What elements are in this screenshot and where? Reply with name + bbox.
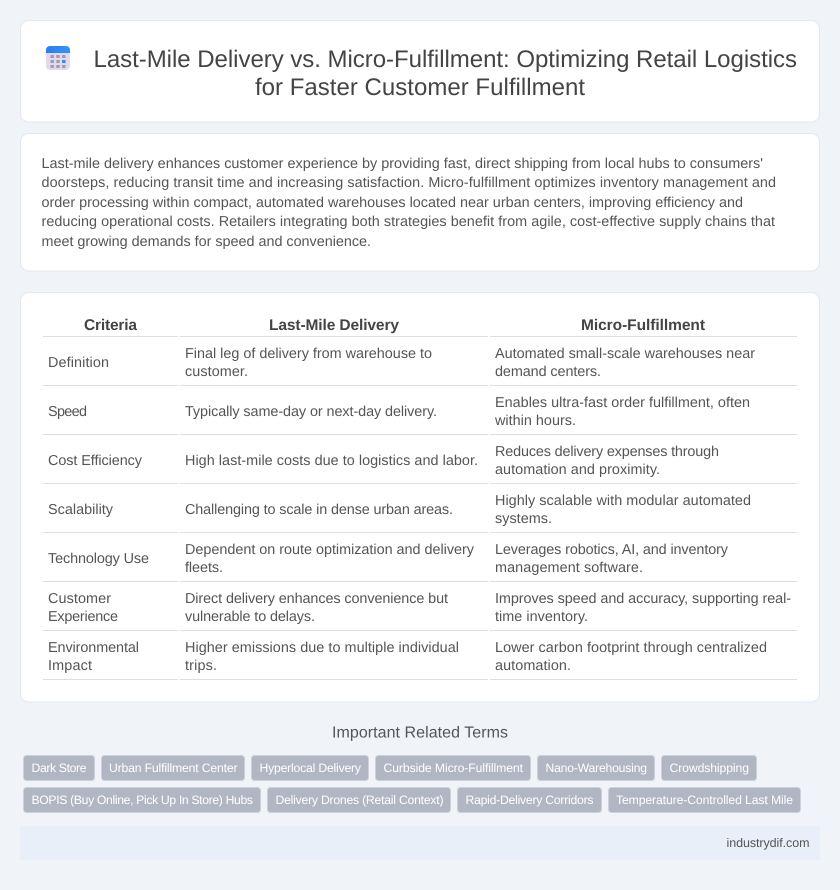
row: definition: Final leg of delivery from warehouse to <box>185 346 432 362</box>
tag list: related terms: Temperature-Controlled Last Mile <box>616 793 793 807</box>
row: customer experience <box>48 591 791 625</box>
row: environmental impact: Lower carbon footprint through centralized <box>495 640 767 656</box>
title: for Faster Customer Fulfillment <box>255 74 585 101</box>
row: scalability: systems. <box>495 511 552 527</box>
row: scalability: Highly scalable with modular automated <box>495 493 751 509</box>
panel: title header <box>20 20 820 122</box>
footer band <box>20 826 820 860</box>
row: definition: Automated small-scale warehouses near <box>495 346 755 362</box>
row: environmental impact: trips. <box>185 658 217 674</box>
row: environmental impact: Higher emissions due to multiple individual <box>185 640 459 656</box>
row: technology use: Technology Use <box>48 551 149 567</box>
row: scalability: Challenging to scale in dense urban areas. <box>185 502 453 518</box>
row: cost efficiency: Reduces delivery expenses through <box>495 444 719 460</box>
row: cost efficiency <box>48 444 719 478</box>
row: technology use: Leverages robotics, AI, and inventory <box>495 542 729 558</box>
row: environmental impact <box>48 640 767 674</box>
row: cost efficiency: Cost Efficiency <box>48 453 143 469</box>
row: customer experience: Customer <box>48 591 111 607</box>
tag list: related terms: Delivery Drones (Retail Context) <box>276 793 444 807</box>
row: definition: demand centers. <box>495 364 601 380</box>
tag list: related terms <box>24 756 800 812</box>
tag list: related terms: Crowdshipping <box>670 761 749 775</box>
row: speed: Typically same-day or next-day delivery. <box>185 404 437 420</box>
table header row: Criteria <box>84 317 137 334</box>
row: definition <box>48 346 755 380</box>
row: environmental impact: Impact <box>48 658 92 674</box>
row: cost efficiency: automation and proximity. <box>495 462 660 478</box>
row: definition: Definition <box>48 355 109 371</box>
row: scalability: Scalability <box>48 502 114 518</box>
row: environmental impact: Environmental <box>48 640 139 656</box>
row: environmental impact: automation. <box>495 658 571 674</box>
row: definition: customer. <box>185 364 248 380</box>
table header row <box>84 317 705 334</box>
row: customer experience: vulnerable to delays. <box>185 609 315 625</box>
panel: summary paragraph <box>20 134 820 271</box>
footer band: industrydif.com <box>726 836 810 850</box>
table header row: Micro-Fulfillment <box>581 317 705 334</box>
row: speed: Speed <box>48 404 87 420</box>
title <box>94 46 797 101</box>
panel: comparison table <box>20 292 820 702</box>
heading: important related terms: Important Related Terms <box>332 724 508 742</box>
row: cost efficiency: High last-mile costs due to logistics and labor. <box>185 453 478 469</box>
panel: summary paragraph: doorsteps, reducing transit time and increasing satisfaction. Micro-fulfillment optimizes inventory management and <box>42 175 776 191</box>
tag list: related terms: Hyperlocal Delivery <box>260 761 362 775</box>
panel: summary paragraph: order processing within compact, automated warehouses located near urban centers, improving efficiency and <box>42 195 743 211</box>
tag list: related terms: Rapid-Delivery Corridors <box>466 793 594 807</box>
tag list: related terms: Nano-Warehousing <box>546 761 647 775</box>
panel: summary paragraph: meet growing demands for speed and convenience. <box>42 234 371 250</box>
row: customer experience: time inventory. <box>495 609 588 625</box>
panel: summary paragraph: Last-mile delivery enhances customer experience by providing fast, direct shipping from local hubs to consumers' <box>42 156 763 172</box>
row: speed: Enables ultra-fast order fulfillment, often <box>495 395 750 411</box>
icon: calendar grid <box>46 46 70 70</box>
row: speed: within hours. <box>494 413 576 429</box>
row: scalability <box>48 493 751 527</box>
tag list: related terms: Urban Fulfillment Center <box>109 761 238 775</box>
row: customer experience: Direct delivery enhances convenience but <box>185 591 448 607</box>
panel: summary paragraph: reducing operational costs. Retailers integrating both strategies benefit from agile, cost-effective supply chains that <box>42 214 775 230</box>
tag list: related terms: Curbside Micro-Fulfillment <box>384 761 524 775</box>
row: customer experience: Experience <box>48 609 118 625</box>
row: technology use: management software. <box>495 560 643 576</box>
row: technology use: fleets. <box>185 560 223 576</box>
title: Last-Mile Delivery vs. Micro-Fulfillment: Optimizing Retail Logistics <box>94 46 797 73</box>
tag list: related terms: BOPIS (Buy Online, Pick Up In Store) Hubs <box>32 793 253 807</box>
row: speed <box>48 395 750 429</box>
tag list: related terms: Dark Store <box>32 761 87 775</box>
table header row: Last-Mile Delivery <box>269 317 399 334</box>
row: technology use <box>48 542 729 576</box>
row: customer experience: Improves speed and accuracy, supporting real- <box>495 591 791 607</box>
row: technology use: Dependent on route optimization and delivery <box>185 542 475 558</box>
